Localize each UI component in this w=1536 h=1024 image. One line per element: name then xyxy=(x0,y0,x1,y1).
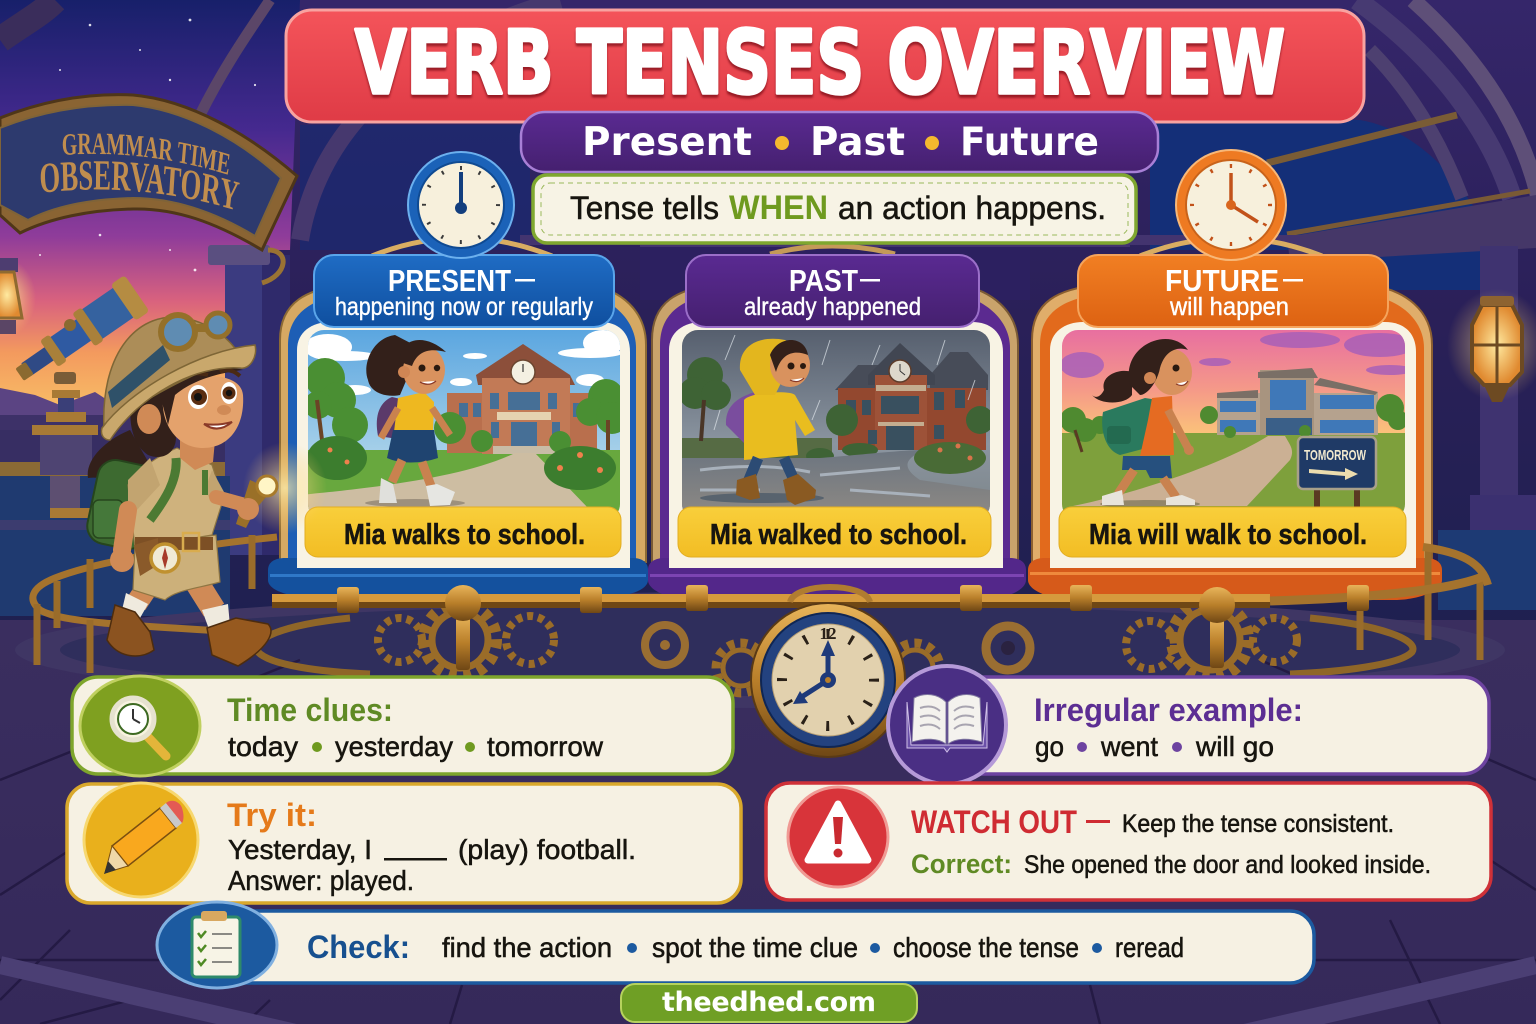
caption: past: Mia walked to school. xyxy=(710,519,967,551)
scene: past tense, Mia walking in the rain xyxy=(679,330,994,520)
caption: past xyxy=(678,507,991,557)
header: past xyxy=(686,246,979,327)
header: future: FUTURE xyxy=(1165,263,1279,298)
icon: open book xyxy=(888,666,1006,784)
clock: present xyxy=(408,152,514,258)
scene: future tense, Mia walking with tomorrow sign xyxy=(1060,330,1416,520)
clock: central brass clock: 12 xyxy=(820,624,836,643)
panel: time clues: Time clues: xyxy=(227,692,393,728)
sign: Grammar Time Observatory: GRAMMAR TIME xyxy=(62,134,230,175)
definition banner: WHEN xyxy=(729,189,828,227)
header: future xyxy=(1078,238,1388,327)
panel: try it xyxy=(67,783,741,903)
character: explorer Mia with flashlight xyxy=(84,313,327,666)
header: past: PAST xyxy=(789,263,858,298)
panel: watch out: Keep the tense consistent. xyxy=(1122,810,1394,838)
definition banner xyxy=(533,175,1136,243)
icon: clipboard checklist xyxy=(157,902,277,988)
panel: check: Check: xyxy=(307,929,410,965)
panel: irregular example: go xyxy=(1035,731,1064,762)
header: present xyxy=(314,238,614,327)
lantern: left xyxy=(0,258,36,338)
panel: time clues: yesterday xyxy=(335,731,453,762)
header: present: PRESENT xyxy=(388,263,511,298)
sign: tomorrow xyxy=(1298,437,1376,489)
panel: check: reread xyxy=(1115,932,1184,963)
footer: website: theedhed.com xyxy=(662,987,876,1018)
gears under the platform xyxy=(257,602,1413,693)
panel: try it: (play) football. xyxy=(458,834,636,865)
panel: irregular example: will go xyxy=(1195,731,1274,762)
lantern: right xyxy=(1447,289,1536,402)
panel: check: choose the tense xyxy=(893,932,1079,963)
caption: present: Mia walks to school. xyxy=(344,519,585,551)
subtitle banner: Present xyxy=(582,120,752,165)
definition banner: Tense tells xyxy=(570,190,719,226)
panel: watch out: Correct: xyxy=(911,849,1012,879)
panel: try it: Yesterday, I xyxy=(228,834,372,865)
caption: future xyxy=(1059,507,1406,557)
panel: time clues: tomorrow xyxy=(487,731,604,762)
panel: time clues: today xyxy=(228,731,298,762)
icon: pencil xyxy=(84,783,198,897)
header: past: already happened xyxy=(744,293,921,321)
caption: present xyxy=(305,507,621,557)
scene: present tense, Mia walking to school xyxy=(300,330,628,520)
panel: irregular example xyxy=(888,666,1489,784)
brass railing xyxy=(33,535,1488,673)
title banner: VERB TENSES OVERVIEW xyxy=(355,12,1285,114)
sign: Grammar Time Observatory xyxy=(0,93,299,252)
panel: try it: Answer: played. xyxy=(228,865,414,896)
panel: watch out: WATCH OUT xyxy=(911,804,1077,840)
panel: check xyxy=(157,902,1314,988)
clock: central brass clock xyxy=(751,603,905,757)
panel: irregular example: went xyxy=(1100,731,1158,762)
subtitle banner: Future xyxy=(960,120,1099,165)
panel: check: spot the time clue xyxy=(652,932,858,963)
card frame: future xyxy=(1028,285,1442,600)
subtitle banner xyxy=(521,112,1158,172)
panel: try it: Try it: xyxy=(227,797,317,833)
caption: future: Mia will walk to school. xyxy=(1089,519,1367,551)
panel: watch out xyxy=(766,783,1491,900)
panel: irregular example: Irregular example: xyxy=(1034,692,1303,728)
sign: tomorrow: TOMORROW xyxy=(1304,447,1367,464)
header: future: will happen xyxy=(1169,293,1289,321)
header: present: happening now or regularly xyxy=(335,293,593,321)
footer: website xyxy=(621,984,917,1022)
panel: check: find the action xyxy=(442,932,612,963)
sign: Grammar Time Observatory: OBSERVATORY xyxy=(40,161,240,210)
icon: warning triangle xyxy=(788,787,888,887)
panel: watch out: She opened the door and looked inside. xyxy=(1024,851,1431,879)
panel: time clues xyxy=(72,676,733,776)
definition banner: an action happens. xyxy=(838,190,1106,226)
card frame: past xyxy=(648,285,1026,600)
subtitle banner: Past xyxy=(810,120,905,165)
card frame: present xyxy=(268,285,648,598)
icon: magnifying glass clock xyxy=(80,676,200,776)
clock: future xyxy=(1176,150,1286,260)
icon: telescope xyxy=(7,275,150,518)
